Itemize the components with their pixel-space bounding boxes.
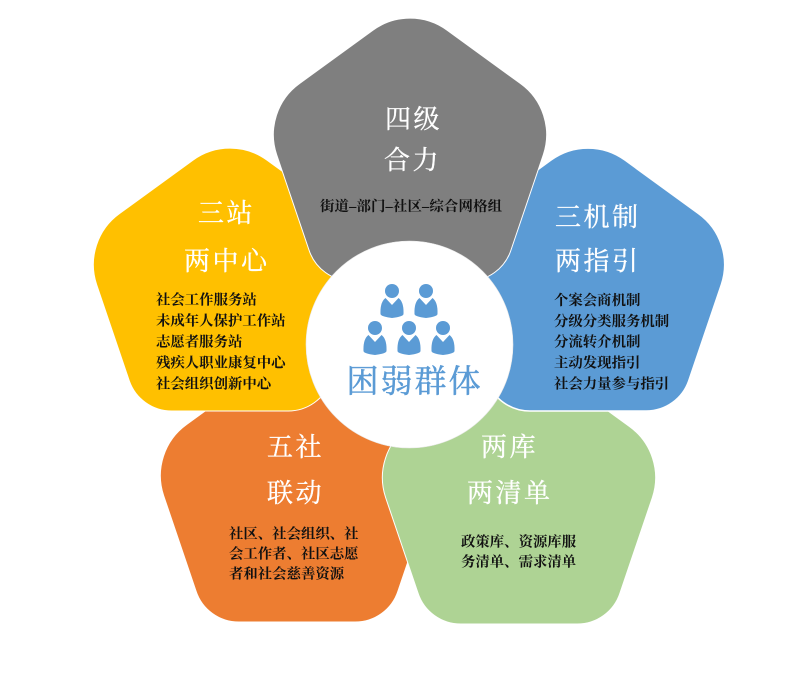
text block: gray: 街道–部门–社区–综合网格组 — [320, 197, 503, 215]
white circle — [306, 241, 513, 448]
heading: 四级 合力: 四级 — [385, 105, 442, 134]
heading: 三机制 两指引: 三机制 — [555, 203, 641, 232]
text block: yellow: 社会工作服务站 — [156, 290, 257, 308]
heading: 三站 两中心: 三站 — [198, 199, 255, 228]
heading: 两库 两清单: 两库 — [481, 433, 538, 462]
text block: yellow: 未成年人保护工作站 — [156, 312, 286, 330]
heading: 两库 两清单 — [467, 433, 553, 508]
text block: yellow: 志愿者服务站 — [156, 332, 242, 350]
heading: 四级 合力 — [384, 105, 442, 175]
text block: green — [461, 532, 577, 570]
green pentagon — [382, 361, 656, 624]
panel: 三机制两指引 — [451, 148, 725, 411]
text block: green: 务清单、需求清单 — [461, 552, 576, 570]
text block: orange: 会工作者、社区志愿 — [229, 544, 359, 562]
text block: orange: 者和社会慈善资源 — [229, 564, 346, 582]
panel: 两库两清单 — [382, 361, 656, 624]
heading: 五社 联动 — [267, 433, 324, 508]
heading: 三机制 两指引 — [555, 203, 641, 276]
panel: 三站两中心 — [93, 148, 367, 411]
text block: blue: 个案会商机制 — [554, 291, 640, 309]
heading: 三站 两中心 — [184, 199, 270, 276]
text block: orange: 社区、社会组织、社 — [229, 524, 359, 542]
heading: 两库 两清单: 两清单 — [467, 479, 553, 508]
heading: 五社 联动: 联动 — [267, 479, 324, 508]
heading: 四级 合力: 合力 — [384, 146, 441, 175]
heading: 五社 联动: 五社 — [267, 433, 324, 462]
yellow pentagon — [93, 148, 367, 411]
text block: blue — [554, 291, 669, 392]
text block: yellow: 社会组织创新中心 — [156, 374, 274, 392]
text block: blue: 社会力量参与指引 — [554, 374, 669, 392]
text block: green: 政策库、资源库服 — [461, 532, 577, 550]
text block: blue: 分级分类服务机制 — [554, 312, 669, 330]
heading: 三站 两中心: 两中心 — [184, 247, 270, 276]
text block: yellow — [156, 290, 288, 392]
text block: yellow: 残疾人职业康复中心 — [156, 354, 288, 372]
center circle: 困弱群体 — [306, 241, 513, 448]
panel: 五社联动 — [160, 359, 434, 622]
heading: 三机制 两指引: 两指引 — [555, 247, 641, 276]
icon: five people — [363, 284, 455, 355]
center label: 困弱群体 — [346, 363, 483, 399]
blue pentagon — [451, 148, 725, 411]
text block: blue: 分流转介机制 — [554, 332, 640, 350]
gray pentagon — [273, 18, 547, 281]
panel: 四级合力 — [273, 18, 547, 281]
text block: orange — [229, 524, 359, 582]
orange pentagon — [160, 359, 434, 622]
text block: blue: 主动发现指引 — [554, 354, 640, 372]
